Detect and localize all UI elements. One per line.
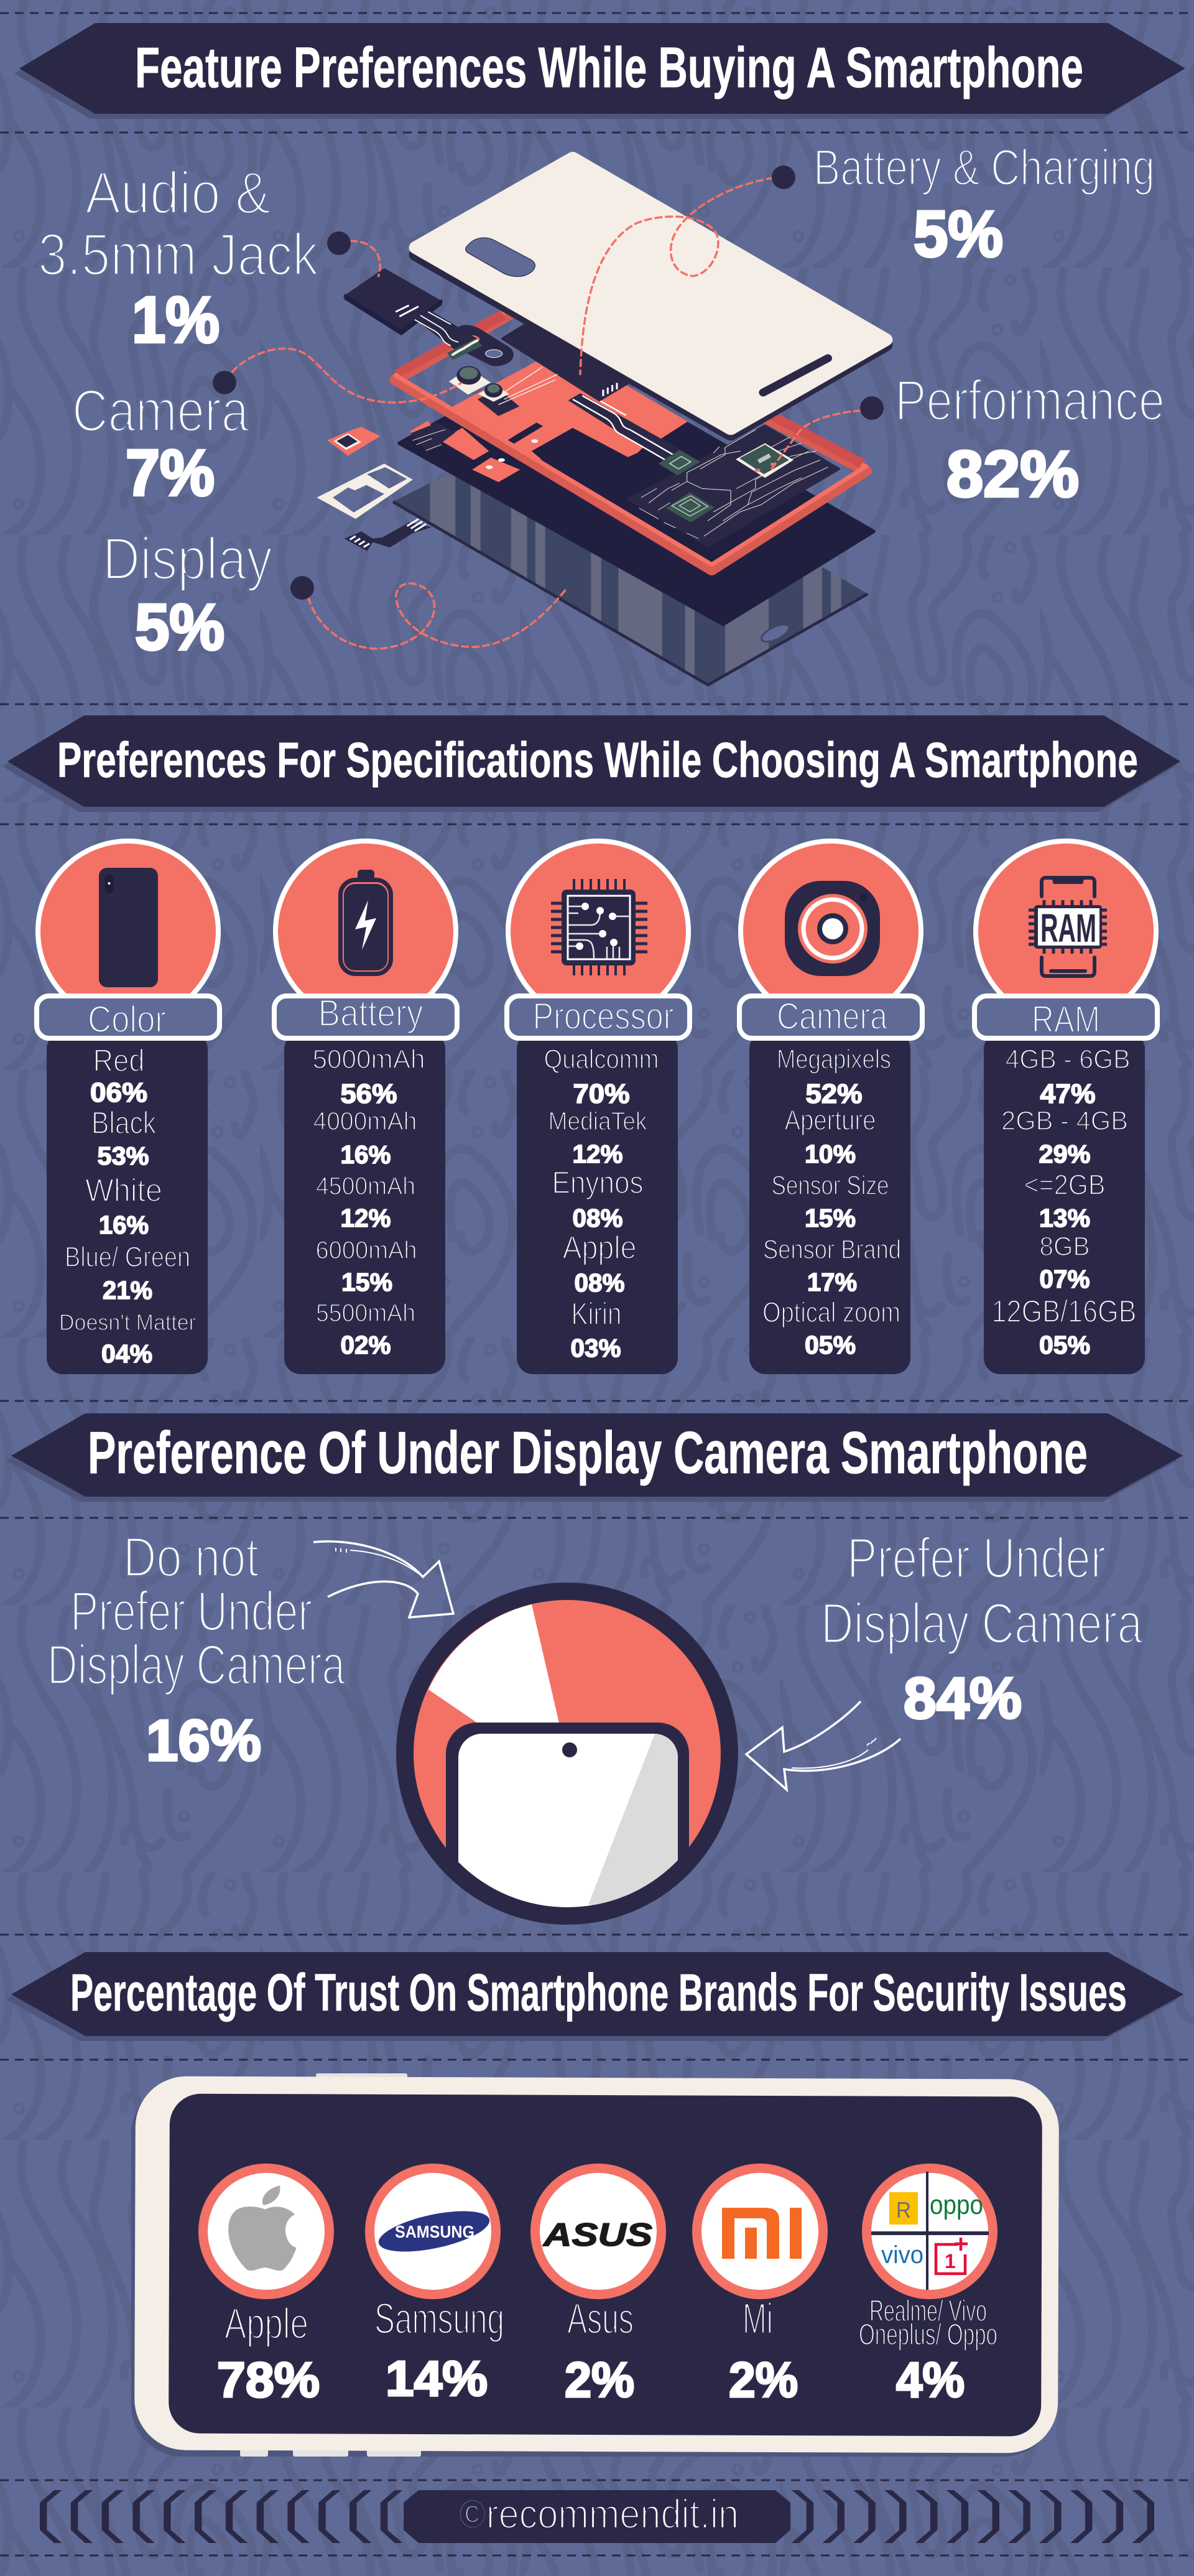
callout: camera bbox=[72, 371, 249, 509]
middle plate bbox=[399, 353, 874, 625]
camera bracket bbox=[451, 325, 514, 366]
callout: display: 5% bbox=[135, 591, 224, 664]
icon: realme: R bbox=[896, 2197, 911, 2223]
callout: battery and charging bbox=[772, 139, 1155, 271]
banner: trust title bbox=[6, 1952, 1183, 2041]
panel: camera: Camera bbox=[777, 995, 888, 1037]
color list: 16% bbox=[99, 1211, 149, 1239]
brand: apple: Apple bbox=[224, 2299, 308, 2348]
processor list bbox=[544, 1044, 659, 1362]
callout: prefer: 84% bbox=[904, 1665, 1022, 1731]
ram list: 05% bbox=[1039, 1331, 1090, 1359]
panel: ram: RAM bbox=[1032, 998, 1100, 1040]
callout: do not prefer: Prefer Under bbox=[70, 1581, 312, 1643]
ram list: 13% bbox=[1039, 1204, 1090, 1232]
arrow: to prefer bbox=[746, 1701, 900, 1790]
brand: samsung: 14% bbox=[386, 2351, 488, 2406]
callout lines bbox=[232, 178, 861, 649]
brand: apple: 78% bbox=[217, 2352, 320, 2407]
processor list: Qualcomm bbox=[544, 1044, 659, 1074]
icon: oneplus bbox=[936, 2238, 968, 2274]
callout: display bbox=[103, 526, 314, 664]
icon: ram chip: RAM bbox=[1040, 906, 1096, 951]
ram list: 07% bbox=[1040, 1265, 1090, 1293]
panel: processor: Processor bbox=[532, 995, 674, 1037]
panel: camera bbox=[739, 841, 922, 1374]
icon: camera bbox=[785, 881, 880, 976]
panel: battery bbox=[274, 841, 457, 1374]
camera list: Optical zoom bbox=[762, 1296, 900, 1328]
callout: audio and jack: 3.5mm Jack bbox=[38, 221, 319, 288]
brand: realme vivo oneplus oppo: Oneplus/ Oppo bbox=[859, 2318, 997, 2351]
icon: samsung logo bbox=[375, 2203, 493, 2259]
callout: do not prefer: Display Camera bbox=[47, 1634, 346, 1696]
icon: samsung logo: SAMSUNG bbox=[395, 2222, 474, 2241]
color list bbox=[59, 1043, 196, 1368]
back cover bbox=[416, 158, 886, 434]
icon: phone back bbox=[99, 868, 158, 987]
icon: ram chip bbox=[1029, 878, 1107, 976]
color list: Black bbox=[91, 1105, 157, 1140]
callout: prefer: Prefer Under bbox=[847, 1527, 1106, 1590]
ram list: 29% bbox=[1039, 1140, 1091, 1168]
chart: pie inside phone bbox=[396, 1583, 738, 1946]
callout: camera: Camera bbox=[72, 378, 249, 444]
callout: do not prefer: 16% bbox=[146, 1708, 261, 1773]
panel: battery: Battery bbox=[318, 992, 423, 1034]
ram list bbox=[991, 1044, 1137, 1359]
panel: ram bbox=[974, 841, 1157, 1374]
chip bbox=[736, 443, 794, 478]
processor list: 70% bbox=[573, 1079, 629, 1109]
camera list: 05% bbox=[805, 1331, 856, 1359]
processor list: 08% bbox=[575, 1268, 624, 1297]
processor list: 08% bbox=[572, 1204, 623, 1232]
chip bbox=[666, 492, 715, 523]
camera list: 10% bbox=[805, 1140, 856, 1168]
brand: realme vivo oneplus oppo: 4% bbox=[896, 2352, 965, 2407]
battery list: 16% bbox=[341, 1140, 391, 1169]
callout: do not prefer: Do not bbox=[123, 1527, 259, 1589]
camera list: Megapixels bbox=[777, 1044, 891, 1074]
banner: feature preferences title bbox=[14, 23, 1185, 119]
right ribbon bbox=[568, 393, 700, 475]
callout: prefer bbox=[821, 1527, 1143, 1731]
icon: cpu bbox=[551, 879, 647, 975]
camera list: Sensor Brand bbox=[763, 1235, 901, 1265]
top-left speaker module bbox=[344, 269, 483, 360]
icon: realme bbox=[889, 2192, 918, 2225]
battery list: 4500mAh bbox=[316, 1173, 415, 1200]
callout: performance bbox=[860, 369, 1165, 511]
camera list: 52% bbox=[806, 1079, 862, 1109]
panel: color bbox=[37, 841, 220, 1374]
color list: Red bbox=[93, 1043, 144, 1078]
callout: camera: 7% bbox=[126, 437, 215, 509]
panel: processor bbox=[507, 841, 690, 1374]
battery list bbox=[312, 1044, 425, 1359]
coral board bbox=[410, 362, 688, 482]
battery list: 12% bbox=[341, 1204, 391, 1232]
color list: 53% bbox=[97, 1142, 149, 1170]
brand: apple bbox=[203, 2169, 330, 2407]
flex cable bbox=[344, 519, 432, 551]
outer frame bbox=[394, 292, 866, 570]
ram list: 12GB/16GB bbox=[991, 1294, 1137, 1329]
display glass layer bbox=[392, 473, 869, 687]
brand: realme vivo oneplus oppo bbox=[859, 2169, 997, 2407]
ram list: 4GB - 6GB bbox=[1005, 1044, 1131, 1074]
footer credit: ©recommendit.in bbox=[459, 2491, 739, 2537]
footer chevrons bbox=[40, 2490, 1154, 2543]
camera list: Aperture bbox=[785, 1104, 876, 1136]
icon: battery bbox=[341, 870, 391, 974]
panel: color: Color bbox=[88, 998, 166, 1040]
phone frame panel bbox=[131, 2073, 1059, 2457]
battery list: 4000mAh bbox=[313, 1107, 417, 1135]
battery list: 56% bbox=[341, 1079, 397, 1109]
battery list: 6000mAh bbox=[316, 1237, 417, 1264]
brand: mi: Mi bbox=[743, 2294, 773, 2343]
ram list: 47% bbox=[1040, 1079, 1096, 1109]
color list: Blue/ Green bbox=[65, 1241, 190, 1273]
processor list: Apple bbox=[562, 1230, 637, 1266]
ram list: 2GB - 4GB bbox=[1001, 1106, 1128, 1136]
battery bar bbox=[502, 323, 629, 401]
callout: battery and charging: 5% bbox=[914, 198, 1003, 271]
icon: asus logo: ASUS bbox=[542, 2217, 652, 2253]
small flex board bbox=[411, 422, 455, 453]
camera list bbox=[762, 1044, 901, 1359]
ram list: 8GB bbox=[1040, 1232, 1090, 1262]
banner: under display camera title bbox=[6, 1413, 1183, 1502]
processor list: Kirin bbox=[571, 1296, 622, 1331]
ram list: <=2GB bbox=[1024, 1169, 1106, 1201]
footer credit bbox=[404, 2490, 790, 2543]
brand: samsung bbox=[369, 2169, 504, 2406]
processor list: 12% bbox=[572, 1140, 623, 1168]
callout: audio and jack: Audio & bbox=[85, 160, 271, 226]
brand: asus bbox=[535, 2169, 662, 2407]
sim tray bbox=[317, 463, 413, 519]
color list: 04% bbox=[101, 1339, 152, 1368]
sim card bbox=[327, 427, 381, 456]
processor list: Enynos bbox=[552, 1165, 643, 1200]
icon: mi logo bbox=[722, 2208, 802, 2259]
brand: realme vivo oneplus oppo: Realme/ Vivo bbox=[869, 2295, 987, 2328]
battery list: 5000mAh bbox=[312, 1044, 425, 1074]
callout: audio and jack: 1% bbox=[132, 284, 220, 356]
icon: oppo: oppo bbox=[930, 2190, 983, 2220]
processor list: 03% bbox=[571, 1334, 621, 1362]
camera list: 17% bbox=[807, 1268, 857, 1296]
callout: display: Display bbox=[103, 526, 272, 592]
color list: 21% bbox=[103, 1276, 152, 1304]
camera list: Sensor Size bbox=[771, 1171, 889, 1201]
brand: asus: Asus bbox=[567, 2294, 634, 2343]
color list: Doesn't Matter bbox=[59, 1309, 196, 1335]
icon: apple logo bbox=[228, 2185, 297, 2271]
brand: asus: 2% bbox=[565, 2352, 634, 2407]
banner: specification preferences title bbox=[2, 715, 1180, 812]
icon: oneplus: 1 bbox=[945, 2250, 956, 2272]
camera lenses bbox=[449, 366, 557, 416]
battery list: 02% bbox=[341, 1331, 391, 1359]
processor list: MediaTek bbox=[548, 1107, 647, 1135]
camera list: 15% bbox=[805, 1204, 856, 1232]
battery list: 5500mAh bbox=[316, 1300, 415, 1327]
battery list: 15% bbox=[341, 1268, 392, 1296]
color list: White bbox=[85, 1173, 162, 1209]
color list: 06% bbox=[90, 1077, 147, 1108]
brand: mi: 2% bbox=[729, 2352, 798, 2407]
brand: samsung: Samsung bbox=[374, 2294, 504, 2343]
arrow: to do not prefer bbox=[313, 1541, 453, 1617]
main circuit board bbox=[629, 426, 838, 546]
illustration: exploded smartphone bbox=[317, 158, 886, 690]
callout: audio and jack bbox=[38, 160, 351, 356]
callout: do not prefer bbox=[47, 1527, 346, 1773]
icon: vivo: vivo bbox=[881, 2241, 923, 2269]
brand: mi bbox=[696, 2169, 823, 2407]
callout: performance: 82% bbox=[946, 438, 1079, 511]
